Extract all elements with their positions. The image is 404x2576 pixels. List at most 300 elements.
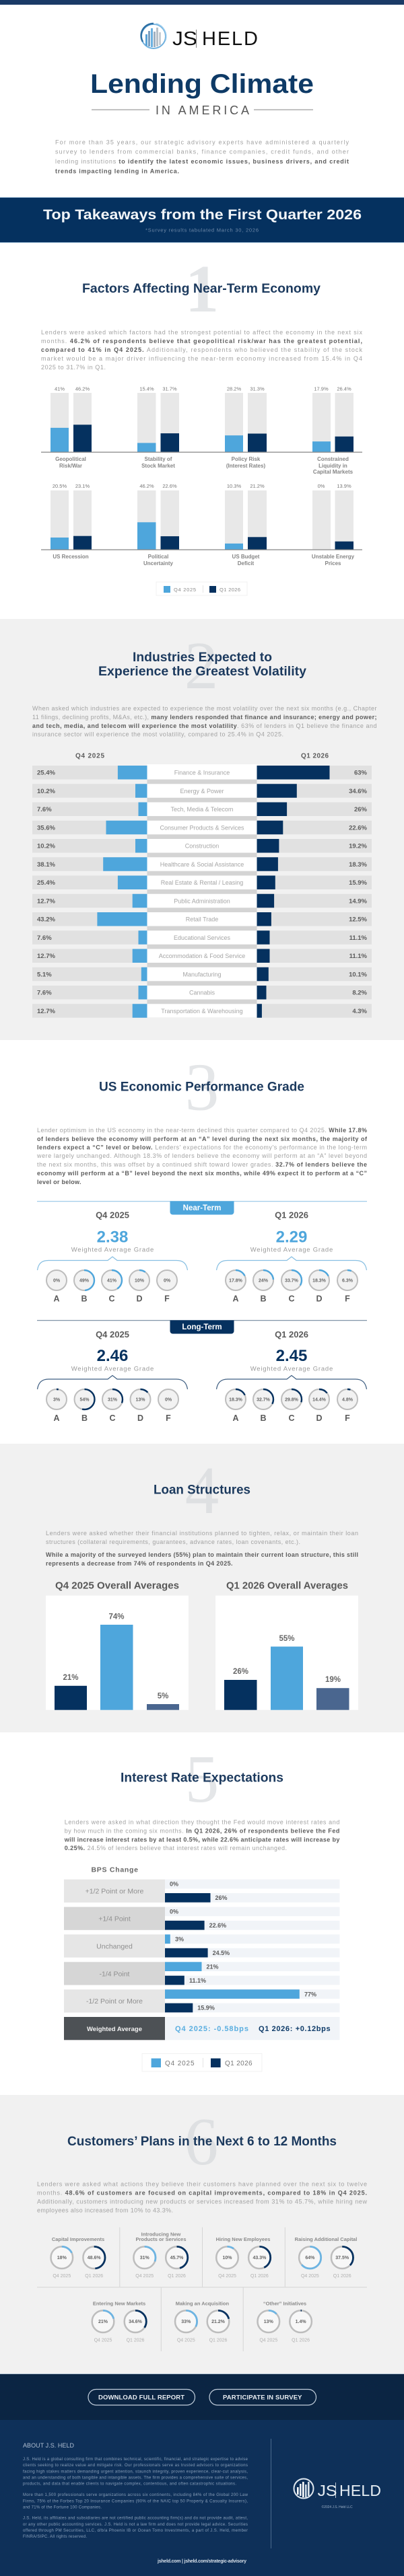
bar chart: factors row 1: Stability of bbox=[145, 456, 172, 462]
bar chart: Q1 2026 averages: Q1 2026 Overall Averages bbox=[226, 1580, 348, 1592]
chart: BPS change: Unchanged bbox=[96, 1942, 133, 1950]
grade group: long-term Q4 2025: F bbox=[166, 1413, 171, 1423]
panel: industries bbox=[0, 619, 404, 1040]
intro text: For more than 35 years, our strategic advisory experts have administered a quarterly bbox=[55, 139, 349, 145]
plan: other initiatives: 1.4% bbox=[296, 2320, 306, 2324]
text: grade bbox=[36, 1127, 368, 1185]
text: customers' plans bbox=[37, 2181, 368, 2213]
plan: raising additional capital bbox=[295, 2236, 357, 2279]
grade group: long-term Q4 2025: 2.46 bbox=[97, 1347, 128, 1365]
grade group: near-term Q1 2026: C bbox=[288, 1294, 295, 1304]
bar chart: factors row 1: 41% bbox=[55, 386, 65, 392]
banner: top takeaways bbox=[0, 197, 404, 243]
text: loan structures: While a majority of the surveyed lenders (55%) plan to maintain their current loan structure, this still bbox=[46, 1551, 358, 1558]
about text: products, and data that enable clients to navigate complex, contentious, and often catastrophic situations. bbox=[23, 2482, 236, 2486]
banner: top takeaways: *Survey results tabulated March 30, 2026 bbox=[145, 227, 259, 233]
grid dividers bbox=[37, 2228, 367, 2351]
bar chart: factors row 1: 28.2% bbox=[227, 386, 241, 392]
diverging bar chart: industries: 4.3% bbox=[352, 1008, 368, 1015]
text: grade: economy will perform at a “B” level beyond the next six months, while 49% expect it to perform at a “C” bbox=[37, 1170, 367, 1177]
grade group: near-term Q1 2026: 2.29 bbox=[276, 1228, 307, 1246]
grade group: near-term Q4 2025: C bbox=[108, 1294, 115, 1304]
grade group: near-term Q4 2025: B bbox=[81, 1294, 88, 1304]
diverging bar chart: industries: 12.7% bbox=[37, 1008, 55, 1015]
plan: hiring new employees: Q4 2025 bbox=[218, 2274, 236, 2279]
button: download full report: DOWNLOAD FULL REPORT bbox=[98, 2394, 184, 2402]
grade group: near-term Q4 2025: 49% bbox=[79, 1278, 90, 1284]
bar chart: factors row 2: US Recession bbox=[53, 554, 89, 560]
text: interest rate bbox=[64, 1819, 339, 1851]
bar chart: factors row 2: 13.9% bbox=[337, 483, 351, 489]
chart: BPS change: 24.5% bbox=[213, 1950, 230, 1956]
title: IN AMERICA bbox=[156, 104, 249, 117]
grade group: near-term Q4 2025: 0% bbox=[164, 1278, 171, 1284]
plan: hiring new employees: Q1 2026 bbox=[250, 2274, 269, 2279]
diverging bar chart: industries: Finance & Insurance bbox=[174, 770, 230, 776]
plan: entering new markets: Q4 2025 bbox=[94, 2339, 112, 2343]
text: customers' plans: Lenders were asked what actions they believe their customers have planned over the next six to twelve bbox=[37, 2181, 367, 2188]
grade group: near-term Q4 2025: 41% bbox=[107, 1278, 117, 1284]
bar chart: Q1 2026 averages: 26% bbox=[233, 1668, 248, 1676]
diverging bar chart: industries: Consumer Products & Services bbox=[160, 824, 244, 831]
button: participate in survey: PARTICIPATE IN SURVEY bbox=[223, 2394, 302, 2402]
chart: BPS change: -1/2 Point or More bbox=[86, 1997, 143, 2005]
diverging bar chart: industries: 26% bbox=[354, 806, 368, 813]
text: factors: months. 46.2% of respondents believe that geopolitical risk/war has the greatest potential, bbox=[41, 338, 362, 344]
about heading: ABOUT J.S. HELD bbox=[23, 2442, 74, 2449]
legend: interest rate: Q1 2026 bbox=[225, 2060, 252, 2067]
chart: BPS change: 77% bbox=[304, 1991, 316, 1998]
plan: other initiatives: 13% bbox=[264, 2320, 274, 2324]
grade group: long-term Q1 2026: 4.8% bbox=[342, 1398, 354, 1402]
diverging bar chart: industries: 10.1% bbox=[349, 971, 368, 978]
bar chart: Q4 2025 averages: 74% bbox=[108, 1613, 125, 1621]
grade group: near-term Q4 2025: A bbox=[53, 1294, 60, 1304]
bar chart: factors row 1: Risk/War bbox=[59, 463, 82, 469]
plan: raising additional capital: 64% bbox=[305, 2256, 315, 2260]
grade group: near-term Q4 2025: 10% bbox=[135, 1278, 145, 1284]
bar chart: factors row 1: Stock Market bbox=[141, 463, 175, 469]
plan: making an acquisition: 21.2% bbox=[211, 2320, 226, 2324]
bar chart: factors row 1 bbox=[41, 386, 362, 475]
grade group: near-term Q1 2026: F bbox=[345, 1294, 350, 1304]
grade group: long-term Q4 2025: D bbox=[137, 1413, 143, 1423]
diverging bar chart: industries: 25.4% bbox=[37, 770, 55, 777]
chart: BPS change: 15.9% bbox=[197, 2005, 215, 2012]
about text: More than 1,500 professionals serve organizations across six continents, including 84% of the Global 200 Law bbox=[23, 2493, 248, 2497]
text: interest rate: will increase interest rates by at least 0.5%, while 22.6% anticipate rates will increase by bbox=[64, 1836, 339, 1843]
grade group: long-term Q1 2026: 14.4% bbox=[312, 1398, 327, 1402]
chart: BPS change: 11.1% bbox=[189, 1977, 206, 1984]
section number 2: 2 bbox=[184, 628, 218, 703]
bar chart: Q4 2025 averages bbox=[46, 1580, 189, 1710]
panel: near-term grades: Near-Term bbox=[183, 1204, 221, 1212]
grade group: long-term Q4 2025: C bbox=[109, 1413, 116, 1423]
section number 3: 3 bbox=[185, 1050, 219, 1125]
plan: other initiatives bbox=[257, 2301, 312, 2343]
grade group: long-term Q4 2025: 0% bbox=[165, 1398, 172, 1402]
plan: introducing new products or services: Introducing New bbox=[141, 2231, 181, 2238]
grade group: near-term Q1 2026: 24% bbox=[259, 1278, 269, 1284]
text: customers' plans: months. 48.6% of customers are focused on capital improvements, compared to 18% in Q4 2025. bbox=[37, 2190, 367, 2197]
about text: clients seeking to realize value and mitigate risk. Our professionals serve as trusted advisors to organizations bbox=[23, 2464, 248, 2468]
chart: BPS change: +1/4 Point bbox=[98, 1915, 131, 1923]
plan: capital improvements: Capital Improvements bbox=[52, 2236, 104, 2242]
bar chart: factors row 2: 21.2% bbox=[250, 483, 265, 489]
section number 5: 5 bbox=[185, 1741, 219, 1816]
heading: interest rate: Interest Rate Expectations bbox=[121, 1771, 283, 1786]
heading: industries: Industries Expected to bbox=[133, 651, 272, 665]
grade group: near-term Q1 2026: Q1 2026 bbox=[275, 1210, 308, 1220]
about text: FINRA/SIPC. All rights reserved. bbox=[23, 2535, 87, 2539]
plan: entering new markets: Entering New Markets bbox=[93, 2301, 145, 2306]
panel: loan structures bbox=[0, 1444, 404, 1732]
heading: loan structures: Loan Structures bbox=[154, 1483, 250, 1498]
bar chart: factors row 2: Uncertainty bbox=[143, 560, 174, 566]
plan: entering new markets: Q1 2026 bbox=[127, 2339, 145, 2343]
plan: capital improvements: Q1 2026 bbox=[85, 2274, 103, 2279]
bar chart: factors row 2: 10.3% bbox=[227, 483, 241, 489]
text: loan structures: structures (collateral requirements, guarantees, advance rates, loan covenants, etc.). bbox=[46, 1539, 300, 1545]
title: Lending Climate bbox=[90, 69, 314, 99]
diverging bar chart: industries: 15.9% bbox=[349, 879, 368, 887]
text: factors: market would be a major driver influencing the near-term economy increased from 15.4% in Q4 bbox=[41, 355, 362, 362]
legend: factors bbox=[156, 582, 247, 595]
diverging bar chart: industries: 10.2% bbox=[37, 788, 55, 795]
chart: BPS change: 0% bbox=[170, 1908, 178, 1915]
plan: capital improvements: 48.6% bbox=[88, 2256, 101, 2260]
grade group: long-term Q1 2026: A bbox=[232, 1413, 239, 1423]
plan: raising additional capital: Q1 2026 bbox=[333, 2274, 351, 2279]
text: interest rate: by how much in the coming six months. In Q1 2026, 26% of respondents believe the Fed bbox=[65, 1827, 339, 1834]
diverging bar chart: industries: Cannabis bbox=[189, 990, 215, 996]
chart: BPS change: Q4 2025: -0.58bps bbox=[175, 2025, 248, 2033]
grade group: long-term Q1 2026: 32.7% bbox=[257, 1398, 271, 1402]
plan: raising additional capital: 37.5% bbox=[335, 2256, 349, 2260]
panel: near-term grades bbox=[37, 1201, 367, 1304]
logo: footer: ©2024 J.S. Held LLC bbox=[322, 2505, 353, 2509]
chart: BPS change: 0% bbox=[170, 1881, 178, 1888]
grade group: long-term Q1 2026: D bbox=[316, 1413, 323, 1423]
text: interest rate: Lenders were asked in what direction they thought the Fed would move interest rates and bbox=[65, 1819, 339, 1826]
grade group: long-term Q1 2026: C bbox=[288, 1413, 295, 1423]
text: factors: 2025 to 31.7% in Q1. bbox=[41, 364, 106, 371]
diverging bar chart: industries: 10.2% bbox=[37, 843, 55, 850]
logo: footer: JS bbox=[318, 2482, 337, 2499]
grade group: long-term Q4 2025: Q4 2025 bbox=[96, 1329, 129, 1339]
plan: introducing new products or services: 31% bbox=[140, 2256, 149, 2260]
bar chart: Q4 2025 averages: 21% bbox=[63, 1674, 79, 1682]
legend: interest rate: Q4 2025 bbox=[165, 2060, 195, 2067]
text: loan structures: represents a decrease from 74% of respondents in Q4 2025. bbox=[46, 1560, 233, 1567]
logo: JS Held: JS bbox=[172, 28, 197, 50]
bar chart: factors row 2: 22.6% bbox=[162, 483, 177, 489]
text: interest rate: 0.25%. 24.5% of lenders believe that interest rates will remain unchanged. bbox=[65, 1845, 287, 1851]
diverging bar chart: industries: 12.5% bbox=[349, 916, 368, 924]
bar chart: factors row 2: Prices bbox=[325, 560, 341, 566]
diverging bar chart: industries: 12.7% bbox=[37, 897, 55, 905]
grade group: near-term Q1 2026: D bbox=[316, 1294, 323, 1304]
grade group: long-term Q4 2025: 31% bbox=[108, 1398, 118, 1402]
text: grade: Lender optimism in the US economy in the near-term declined this quarter compared to Q4 2025. While 17.8% bbox=[37, 1127, 367, 1134]
heading: industries bbox=[98, 651, 306, 679]
grade group: long-term Q1 2026: 2.45 bbox=[276, 1347, 307, 1365]
text: customers' plans: employees also increased from 10% to 43.3%. bbox=[37, 2207, 173, 2213]
bar chart: factors row 1: Constrained bbox=[317, 456, 349, 462]
plan: introducing new products or services bbox=[133, 2231, 188, 2279]
about text: and 71% of the Fortune 100 Companies. bbox=[23, 2505, 102, 2509]
plan: entering new markets: 21% bbox=[98, 2320, 108, 2324]
about text: or any other public accounting services. J.S. Held is not a law firm and does not provide legal advice. Securities bbox=[23, 2523, 248, 2527]
plan: other initiatives: Q1 2026 bbox=[292, 2339, 310, 2343]
plan: raising additional capital: Q4 2025 bbox=[301, 2274, 319, 2279]
diverging bar chart: industries: 8.2% bbox=[352, 990, 368, 997]
grade group: near-term Q1 2026: B bbox=[260, 1294, 267, 1304]
diverging bar chart: industries: 7.6% bbox=[37, 806, 52, 813]
grade group: near-term Q4 2025: 2.38 bbox=[97, 1228, 128, 1246]
chart: BPS change: Weighted Average bbox=[87, 2026, 142, 2033]
heading: grade: US Economic Performance Grade bbox=[99, 1080, 304, 1094]
bar chart: factors row 2: 46.2% bbox=[139, 483, 154, 489]
bar chart: Q4 2025 averages: Q4 2025 Overall Averages bbox=[55, 1580, 179, 1592]
text: factors: compared to 41% in Q4 2025. Additionally, respondents who believed the stability of the stock bbox=[41, 346, 362, 353]
top bar bbox=[0, 0, 404, 5]
plan: introducing new products or services: Q4 2025 bbox=[135, 2274, 154, 2279]
chart: BPS change: Q1 2026: +0.12bps bbox=[259, 2025, 331, 2033]
heading: customers' plans: Customers’ Plans in the Next 6 to 12 Months bbox=[67, 2135, 337, 2149]
grade group: near-term Q1 2026: 6.3% bbox=[342, 1278, 354, 1284]
grade group: long-term Q1 2026: 18.3% bbox=[229, 1398, 243, 1402]
text: grade: of lenders believe the economy will perform at an “A” level during the next six months, the majority of bbox=[37, 1136, 368, 1142]
about text: and an understanding of both tangible and intangible assets. The firm provides a comprehensive suite of services, bbox=[23, 2476, 248, 2480]
bar chart: factors row 2: 23.1% bbox=[75, 483, 90, 489]
button: participate in survey bbox=[209, 2390, 316, 2405]
bar chart: factors row 1: Geopolitical bbox=[55, 456, 86, 462]
intro text: lending institutions to identify the latest economic issues, business drivers, and credit bbox=[55, 158, 349, 165]
logo: JS Held bbox=[141, 24, 258, 50]
grade group: near-term Q1 2026: Weighted Average Grade bbox=[250, 1246, 333, 1254]
bar chart: factors row 1: Liquidity in bbox=[318, 463, 347, 469]
grade group: near-term Q4 2025: 0% bbox=[53, 1278, 61, 1284]
text: industries: When asked which industries are expected to experience the most volatility over the next six months (e.g., Chapter bbox=[32, 705, 377, 712]
legend: interest rate bbox=[142, 2053, 262, 2071]
plan: other initiatives: “Other” Initiatives bbox=[263, 2301, 306, 2306]
grade group: long-term Q1 2026: Weighted Average Grade bbox=[250, 1366, 333, 1372]
diverging bar chart: industries: Real Estate & Rental / Leasing bbox=[161, 879, 243, 886]
panel: call-to-action buttons bbox=[0, 2373, 404, 2420]
grade group: near-term Q1 2026 bbox=[217, 1210, 366, 1304]
chart: BPS change bbox=[64, 1866, 339, 2040]
grade group: near-term Q4 2025: Q4 2025 bbox=[96, 1210, 129, 1220]
bar chart: factors row 2: 0% bbox=[318, 483, 325, 489]
diverging bar chart: industries: Accommodation & Food Service bbox=[159, 953, 245, 959]
text: factors: Lenders were asked which factors had the strongest potential to affect the economy in the next six bbox=[41, 329, 363, 336]
diverging bar chart: industries: 34.6% bbox=[349, 788, 368, 795]
diverging bar chart: industries: 11.1% bbox=[349, 934, 368, 942]
diverging bar chart: industries: Public Administration bbox=[174, 897, 230, 904]
title bbox=[90, 69, 314, 117]
plan: other initiatives: Q4 2025 bbox=[259, 2339, 277, 2343]
diverging bar chart: industries: Construction bbox=[185, 843, 219, 850]
bar chart: Q1 2026 averages bbox=[215, 1580, 358, 1710]
bar chart: factors row 2 bbox=[41, 483, 362, 566]
diverging bar chart: industries: Q1 2026 bbox=[301, 752, 329, 760]
grade group: long-term Q4 2025: 3% bbox=[53, 1398, 61, 1402]
bar chart: factors row 2: Political bbox=[148, 554, 168, 560]
text: industries bbox=[32, 705, 377, 737]
bar chart: factors row 2: Unstable Energy bbox=[312, 554, 355, 560]
plan: making an acquisition: Q4 2025 bbox=[177, 2339, 195, 2343]
plan: introducing new products or services: Q1 2026 bbox=[168, 2274, 186, 2279]
diverging bar chart: industries: 5.1% bbox=[37, 971, 52, 978]
grade group: long-term Q4 2025: Weighted Average Grade bbox=[71, 1366, 154, 1372]
legend: factors: Q4 2025 bbox=[174, 587, 196, 593]
footer links: jsheld.com | jsheld.com/strategic-advisory bbox=[157, 2559, 246, 2564]
diverging bar chart: industries: 19.2% bbox=[349, 843, 368, 850]
plan: hiring new employees: 10% bbox=[222, 2256, 232, 2260]
text: customers' plans: Additionally, customers introducing new products or services increased from 31% to 45.7%, while hiring new bbox=[37, 2198, 368, 2205]
bar chart: factors row 1: Capital Markets bbox=[313, 469, 354, 475]
panel: long-term grades bbox=[37, 1320, 367, 1423]
diverging bar chart: industries: 63% bbox=[354, 770, 368, 777]
diverging bar chart: industries: 12.7% bbox=[37, 953, 55, 960]
plan: making an acquisition: Q1 2026 bbox=[209, 2339, 228, 2343]
plan: introducing new products or services: Products or Services bbox=[135, 2236, 187, 2242]
panel: customers' plans bbox=[0, 2095, 404, 2373]
grade group: near-term Q4 2025: Weighted Average Grade bbox=[71, 1246, 154, 1254]
diverging bar chart: industries: 35.6% bbox=[37, 824, 55, 832]
grade group: near-term Q4 2025: D bbox=[136, 1294, 143, 1304]
banner: top takeaways: Top Takeaways from the First Quarter 2026 bbox=[43, 207, 362, 223]
section number 6: 6 bbox=[184, 2104, 218, 2179]
plan: hiring new employees: 43.3% bbox=[252, 2256, 267, 2260]
grade group: long-term Q4 2025: 54% bbox=[79, 1398, 90, 1402]
chart: BPS change: BPS Change bbox=[92, 1866, 138, 1874]
text: grade: lenders expect a “C” level or below. Lenders’ expectations for the economy’s performance in the long-term bbox=[37, 1144, 367, 1150]
heading: industries: Experience the Greatest Volatility bbox=[98, 665, 306, 679]
grade group: long-term Q1 2026: Q1 2026 bbox=[275, 1329, 308, 1339]
text: grade: level or below. bbox=[37, 1179, 81, 1185]
plan: making an acquisition: Making an Acquisition bbox=[176, 2301, 229, 2306]
plan: hiring new employees bbox=[216, 2236, 271, 2279]
bar chart: factors row 2: Deficit bbox=[238, 560, 255, 566]
grade group: near-term Q1 2026: A bbox=[232, 1294, 239, 1304]
plan: making an acquisition: 33% bbox=[181, 2320, 191, 2324]
bar chart: factors row 2: US Budget bbox=[232, 554, 260, 560]
chart: BPS change: -1/4 Point bbox=[100, 1970, 130, 1978]
heading: factors: Factors Affecting Near-Term Economy bbox=[82, 282, 321, 296]
diverging bar chart: industries: 7.6% bbox=[37, 934, 52, 942]
diverging bar chart: industries: Educational Services bbox=[174, 934, 231, 941]
diverging bar chart: industries: Transportation & Warehousing bbox=[161, 1008, 243, 1015]
text: factors bbox=[41, 329, 363, 371]
chart: BPS change: 26% bbox=[215, 1894, 228, 1901]
diverging bar chart: industries: 25.4% bbox=[37, 879, 55, 887]
plan: raising additional capital: Raising Additional Capital bbox=[295, 2236, 357, 2242]
about text: J.S. Held, its affiliates and subsidiaries are not certified public accounting firm(s) and do not provide audit, attest, bbox=[23, 2517, 248, 2521]
grade group: long-term Q4 2025 bbox=[38, 1329, 187, 1423]
logo: JS Held: HELD bbox=[202, 28, 258, 50]
grade group: long-term Q1 2026: 29.8% bbox=[285, 1398, 299, 1402]
diverging bar chart: industries: 7.6% bbox=[37, 990, 52, 997]
diverging bar chart: industries: 38.1% bbox=[37, 861, 55, 869]
panel: long-term grades: Long-Term bbox=[182, 1323, 222, 1331]
text: industries: 11 filings, declining profits, M&As, etc.), many lenders responded that finance and insurance; energy and power; bbox=[32, 714, 377, 721]
chart: BPS change: 3% bbox=[175, 1936, 184, 1943]
logo: footer: HELD bbox=[339, 2482, 381, 2499]
bar chart: factors row 1: 31.7% bbox=[162, 386, 177, 392]
plan: introducing new products or services: 45.7% bbox=[170, 2256, 184, 2260]
bar chart: factors row 1: 31.3% bbox=[250, 386, 265, 392]
plan: capital improvements: Q4 2025 bbox=[53, 2274, 71, 2279]
about text: offered through PM Securities, LLC, d/b/a Phoenix IB or Ocean Tomo Investments, a part of J.S. Held, member bbox=[23, 2529, 248, 2533]
bar chart: factors row 1: 26.4% bbox=[337, 386, 351, 392]
diverging bar chart: industries: Q4 2025 bbox=[75, 752, 104, 760]
about text: Firms, 75% of the Forbes Top 20 Insurance Companies (90% of the NAIC top 50 Property & Casualty Insurers), bbox=[23, 2499, 248, 2503]
bar chart: Q1 2026 averages: 55% bbox=[279, 1635, 295, 1643]
grade group: near-term Q4 2025: F bbox=[164, 1294, 170, 1304]
chart: BPS change: 21% bbox=[206, 1963, 219, 1970]
section number 1: 1 bbox=[185, 251, 219, 326]
intro text: trends impacting lending in America. bbox=[55, 168, 179, 175]
intro text: survey to lenders from commercial banks, finance companies, credit funds, and other bbox=[55, 148, 349, 155]
text: loan structures: Lenders were asked whether their financial institutions planned to tighten, relax, or maintain their loan bbox=[46, 1530, 358, 1537]
chart: BPS change: +1/2 Point or More bbox=[86, 1888, 143, 1896]
diverging bar chart: industries: Tech, Media & Telecom bbox=[171, 806, 233, 813]
diverging bar chart: industries bbox=[32, 752, 372, 1018]
chart: BPS change: 22.6% bbox=[209, 1922, 226, 1929]
bar chart: factors row 1: 15.4% bbox=[139, 386, 154, 392]
text: loan structures bbox=[46, 1530, 358, 1567]
bar chart: factors row 1: Policy Risk bbox=[232, 456, 261, 462]
bar chart: Q1 2026 averages: 19% bbox=[325, 1676, 341, 1684]
text: grade: the next six months, this was offset by a continued shift toward lower grades. 32.7% of lenders believe the bbox=[37, 1161, 367, 1168]
about text: facing high stakes matters demanding urgent attention, staunch integrity, proven experience, clear-cut analysis, bbox=[23, 2470, 248, 2474]
section number 4: 4 bbox=[185, 1452, 219, 1528]
plan: entering new markets bbox=[92, 2301, 146, 2343]
plan: entering new markets: 34.6% bbox=[129, 2320, 143, 2324]
grade group: long-term Q1 2026: B bbox=[260, 1413, 267, 1423]
text: industries: insurance sector will experience the most volatility, compared to 25.4% in Q4 2025. bbox=[32, 731, 283, 737]
legend: factors: Q1 2026 bbox=[220, 587, 240, 593]
logo: footer bbox=[294, 2478, 381, 2509]
button: download full report bbox=[88, 2390, 195, 2405]
grade group: long-term Q4 2025: 13% bbox=[135, 1398, 145, 1402]
plan: making an acquisition bbox=[175, 2301, 229, 2343]
diverging bar chart: industries: 14.9% bbox=[349, 897, 368, 905]
grade group: long-term Q4 2025: A bbox=[53, 1413, 60, 1423]
grade group: near-term Q4 2025 bbox=[38, 1210, 187, 1304]
diverging bar chart: industries: Energy & Power bbox=[180, 788, 224, 795]
text: industries: and tech, media, and telecom will experience the most volatility. 63% of lenders in Q1 believe the finance and bbox=[32, 723, 377, 729]
bar chart: factors row 1: (Interest Rates) bbox=[226, 463, 265, 469]
about text bbox=[23, 2458, 248, 2539]
plan: capital improvements bbox=[50, 2236, 105, 2279]
diverging bar chart: industries: 11.1% bbox=[349, 953, 368, 960]
diverging bar chart: industries: 18.3% bbox=[349, 861, 368, 869]
grade group: near-term Q1 2026: 33.7% bbox=[285, 1278, 299, 1284]
diverging bar chart: industries: Healthcare & Social Assistance bbox=[160, 861, 244, 868]
diverging bar chart: industries: Retail Trade bbox=[186, 916, 218, 923]
bar chart: factors row 2: 20.5% bbox=[53, 483, 67, 489]
text: grade: were largely unchanged. Although 18.3% of lenders believe the economy will perform at an “A” level beyond bbox=[36, 1152, 367, 1159]
diverging bar chart: industries: Manufacturing bbox=[182, 971, 222, 978]
about text: J.S. Held is a global consulting firm that combines technical, scientific, financial, and strategic expertise to advise bbox=[23, 2458, 248, 2462]
diverging bar chart: industries: 43.2% bbox=[37, 916, 55, 924]
grade group: long-term Q1 2026: F bbox=[345, 1413, 350, 1423]
bar chart: Q4 2025 averages: 5% bbox=[158, 1693, 168, 1701]
panel: footer about bbox=[0, 2420, 404, 2576]
